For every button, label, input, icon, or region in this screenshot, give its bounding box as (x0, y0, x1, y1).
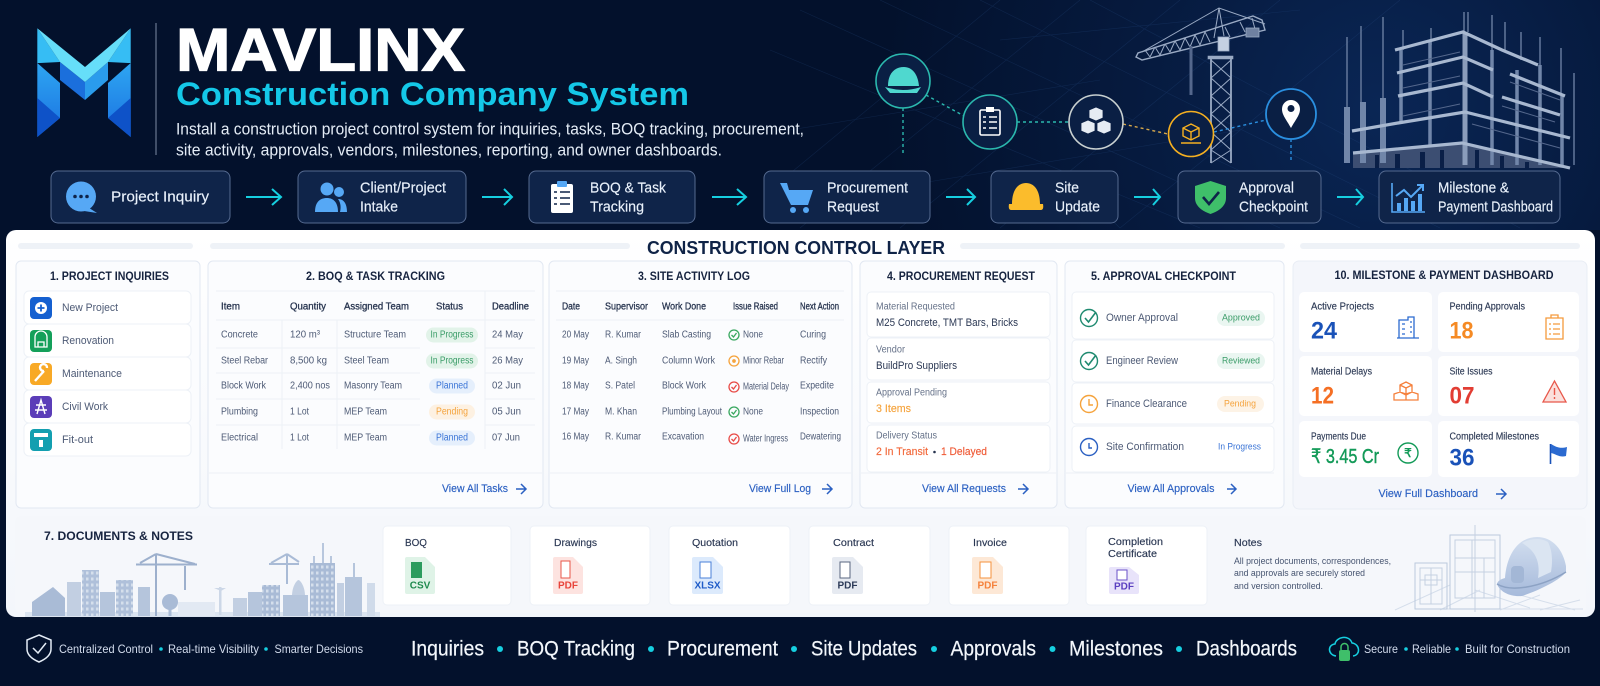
link: view full dashboard: View Full Dashboard (1378, 488, 1478, 500)
field: material requested: Material Requested (876, 302, 955, 312)
notes: and approvals are securely stored (1234, 568, 1365, 578)
table rows: 8,500 kg (290, 356, 327, 366)
building rebar (1347, 12, 1574, 165)
icon node: location pin (1266, 89, 1316, 139)
log rows: Column Work (662, 356, 716, 366)
field: delivery status: 2 In Transit (876, 446, 928, 458)
kpi: payments due: Payments Due (1311, 432, 1366, 442)
kpi: material delays: Material Delays (1311, 366, 1372, 378)
arrow 3 (712, 189, 746, 205)
log rows: Plumbing Layout (662, 406, 722, 418)
log rows: Inspection (800, 406, 839, 418)
footer: cloud lock icon (1329, 637, 1359, 661)
footer: right tagline: Secure (1364, 642, 1398, 656)
table rows: Structure Team (344, 330, 406, 340)
description: Install a construction project control system for inquiries, tasks, BOQ tracking, procurement, (176, 120, 804, 138)
log rows: R. Kumar (605, 330, 642, 340)
panel: site activity log: 3. SITE ACTIVITY LOG (638, 271, 750, 283)
table rows: Masonry Team (344, 380, 402, 392)
row: owner approval (1072, 292, 1274, 339)
log rows: None (743, 330, 763, 340)
table header: Status (436, 302, 463, 312)
kpi: active projects (1299, 292, 1432, 352)
row: site confirmation: In Progress (1218, 442, 1261, 452)
panel: project inquiries: 1. PROJECT INQUIRIES (50, 271, 169, 283)
row: new project: New Project (62, 302, 118, 314)
arrow 4 (946, 189, 975, 205)
footer: left tagline (59, 642, 363, 656)
flow step 3: boq task tracking: Tracking (590, 198, 644, 216)
notes (1234, 537, 1391, 591)
footer: right tagline: Built for Construction (1465, 642, 1570, 656)
flow step 7: milestone dashboard (1379, 171, 1560, 223)
document: completion certificate pdf (1086, 526, 1207, 605)
status pills: Pending (436, 406, 468, 418)
flow step 6: approval checkpoint: Approval (1239, 180, 1294, 196)
flow step 3: boq task tracking: BOQ & Task (590, 180, 666, 196)
kpi: pending approvals: Pending Approvals (1450, 302, 1525, 312)
status pills: In Progress (430, 356, 474, 366)
kpi: completed milestones (1438, 421, 1579, 477)
document: completion certificate pdf: PDF (1114, 582, 1134, 592)
title: MAVLINX (176, 16, 465, 84)
log rows: 19 May (562, 356, 589, 366)
icon: users (315, 182, 347, 212)
row: maintenance: Maintenance (62, 368, 122, 380)
log header: Date (562, 302, 580, 312)
panel: procurement request: 4. PROCUREMENT REQUEST (887, 271, 1035, 283)
log rows (562, 330, 841, 444)
logo divider (156, 23, 157, 155)
footer: right tagline (1364, 642, 1570, 656)
document: invoice pdf: Invoice (973, 537, 1007, 549)
kpi: completed milestones: 36 (1450, 444, 1474, 472)
status pills: Planned (436, 432, 468, 444)
icon node: checklist (963, 95, 1017, 149)
footer: modules strip: Dashboards (1196, 638, 1297, 660)
log rows: Minor Rebar (743, 356, 784, 366)
kpi: pending approvals (1438, 292, 1579, 352)
flow step 1: project inquiry: Project Inquiry (111, 188, 210, 206)
log header: Supervisor (605, 302, 649, 312)
footer: left tagline: Real-time Visibility (168, 642, 259, 656)
row: renovation: Renovation (62, 335, 114, 347)
table rows (221, 330, 523, 444)
flow step 5: site update (991, 171, 1118, 223)
notes: All project documents, correspondences, (1234, 556, 1391, 566)
row: site confirmation (1072, 426, 1274, 472)
background glow (760, 0, 1600, 230)
link: view full log: View Full Log (749, 483, 811, 495)
table header: Item (221, 302, 240, 312)
flow step 4: procurement request: Procurement (827, 180, 909, 196)
log rows: Expedite (800, 380, 834, 392)
subtitle: Construction Company System (176, 76, 689, 112)
table rows: MEP Team (344, 406, 387, 418)
icon node: material stack (1069, 95, 1123, 149)
table rows: Plumbing (221, 406, 258, 418)
log rows: Slab Casting (662, 330, 711, 340)
document: completion certificate pdf: Certificate (1108, 548, 1157, 560)
kpi: material delays: 12 (1311, 382, 1334, 410)
log rows: M. Khan (605, 406, 637, 418)
field: vendor (867, 338, 1050, 380)
arrow 6 (1337, 189, 1363, 205)
document: drawings pdf: PDF (558, 580, 578, 592)
link: view all tasks: View All Tasks (442, 483, 508, 495)
table rows: Concrete (221, 330, 258, 340)
row: finance clearance (1072, 383, 1274, 424)
panel: milestone and payment dashboard: 10. MILESTONE & PAYMENT DASHBOARD (1334, 270, 1554, 282)
arrow 1 (246, 189, 281, 205)
table rows: 1 Lot (290, 406, 309, 418)
footer: right tagline: Reliable (1412, 642, 1451, 656)
document: contract pdf: Contract (833, 537, 874, 549)
field: approval pending: 3 Items (876, 403, 911, 415)
kpi: active projects: 24 (1311, 318, 1338, 344)
panel: documents and notes (15, 516, 1586, 617)
panel: project inquiries (16, 261, 200, 508)
status pills: In Progress (430, 330, 474, 340)
field: material requested (867, 292, 1050, 337)
flow step 7: milestone dashboard: Payment Dashboard (1438, 198, 1553, 216)
table rows: 1 Lot (290, 432, 309, 444)
kpi: payments due: ₹ 3.45 Cr (1311, 446, 1379, 468)
city skyline illustration (25, 543, 380, 617)
field: approval pending: Approval Pending (876, 388, 947, 398)
flow step 2: client intake (298, 171, 466, 223)
flow step 2: client intake: Client/Project (360, 180, 447, 196)
log rows: 16 May (562, 432, 589, 442)
flow step 4: procurement request: Request (827, 198, 880, 216)
link: view all approvals: View All Approvals (1128, 483, 1215, 495)
log rows: S. Patel (605, 380, 635, 392)
icon: speech bubble (66, 182, 97, 213)
document: boq csv (383, 526, 511, 605)
field: approval pending (867, 382, 1050, 423)
log rows: A. Singh (605, 356, 637, 366)
log rows: Rectify (800, 356, 827, 366)
footer: left tagline: Centralized Control (59, 642, 153, 656)
row: owner approval: Owner Approval (1106, 312, 1178, 324)
tower crane illustration (1136, 8, 1265, 163)
blueprint lines background (770, 0, 1520, 228)
main white panel (6, 230, 1595, 617)
icon: growth chart (1392, 183, 1425, 212)
panel: boq and task tracking: 2. BOQ & TASK TRACKING (306, 271, 445, 283)
footer: modules strip: BOQ Tracking (517, 638, 635, 660)
kpi: material delays (1299, 356, 1432, 416)
footer: left tagline: Smarter Decisions (274, 642, 363, 656)
row: owner approval: Approved (1222, 312, 1260, 324)
table rows: Steel Rebar (221, 356, 269, 366)
table header: Deadline (492, 302, 529, 312)
log rows: 20 May (562, 330, 589, 340)
table header: Assigned Team (344, 302, 409, 312)
panel: approval checkpoint: 5. APPROVAL CHECKPOINT (1091, 271, 1236, 283)
flow step 3: boq task tracking (529, 171, 695, 223)
icon: clipboard (551, 181, 573, 213)
issue status icons (729, 330, 739, 444)
kpi: payments due (1299, 421, 1432, 477)
table rows: Steel Team (344, 356, 389, 366)
log rows: None (743, 406, 763, 418)
footer: modules strip (411, 638, 1297, 660)
table rows: Block Work (221, 380, 267, 392)
panel: site activity log (549, 261, 852, 508)
document: invoice pdf: PDF (978, 580, 998, 592)
panel: milestone and payment dashboard (1293, 261, 1587, 509)
icon: hard hat (1009, 183, 1043, 210)
table header: Quantity (290, 302, 326, 312)
document: quotation xlsx: Quotation (692, 537, 738, 549)
row: engineer review (1072, 340, 1274, 382)
table rows: 26 May (492, 356, 523, 366)
description (176, 120, 804, 160)
log rows: 18 May (562, 380, 589, 392)
link: view all requests: View All Requests (922, 483, 1006, 495)
document: boq csv: BOQ (405, 537, 427, 549)
footer: shield icon (27, 635, 51, 662)
status pills (426, 328, 478, 446)
icon node: gold materials (1168, 112, 1214, 156)
footer: modules strip: Site Updates (811, 638, 917, 660)
table rows: 05 Jun (492, 406, 521, 418)
footer: modules strip: Procurement (667, 638, 778, 660)
table rows: 2,400 nos (290, 380, 330, 392)
flow step 5: site update: Site (1055, 180, 1079, 196)
decorative heading bands (18, 243, 1580, 249)
log header: Next Action (800, 302, 839, 312)
flow step 4: procurement request (764, 171, 930, 223)
field: delivery status: Delivery Status (876, 430, 937, 442)
log rows: Curing (800, 330, 826, 340)
row: civil work (24, 390, 191, 423)
footer: modules strip: Approvals (950, 638, 1036, 660)
building ground floor (1353, 143, 1570, 168)
row: finance clearance: Pending (1224, 398, 1256, 410)
log rows: Block Work (662, 380, 707, 392)
kpi: completed milestones: Completed Milestones (1450, 432, 1539, 442)
log rows: Dewatering (800, 432, 841, 442)
table rows: 24 May (492, 330, 523, 340)
row: fit-out: Fit-out (62, 434, 93, 446)
log rows: R. Kumar (605, 432, 642, 442)
row: fit-out (24, 423, 191, 456)
panel: boq and task tracking (208, 261, 543, 508)
log rows: Water Ingress (743, 434, 788, 444)
flow step 1: project inquiry (51, 171, 230, 223)
row: engineer review: Reviewed (1222, 356, 1260, 366)
kpi: site issues (1438, 356, 1579, 416)
flow step 5: site update: Update (1055, 198, 1100, 216)
field: delivery status: 1 Delayed (941, 446, 987, 458)
kpi: active projects: Active Projects (1311, 302, 1374, 312)
field: material requested: M25 Concrete, TMT Bars, Bricks (876, 317, 1018, 329)
building slabs (1352, 32, 1570, 168)
row: engineer review: Engineer Review (1106, 355, 1178, 367)
icon: cart (780, 183, 813, 213)
building under construction illustration (1347, 12, 1574, 168)
icon node: helmet (876, 54, 930, 108)
document: invoice pdf (949, 526, 1069, 605)
row: civil work: Civil Work (62, 401, 108, 413)
table rows: 07 Jun (492, 432, 520, 444)
log rows: Excavation (662, 432, 704, 442)
row: renovation (24, 324, 191, 357)
document: quotation xlsx (669, 526, 790, 605)
row: new project (24, 291, 191, 324)
dotted connectors (903, 95, 1291, 160)
description: site activity, approvals, vendors, milestones, reporting, and owner dashboards. (176, 140, 722, 160)
document: drawings pdf: Drawings (554, 537, 597, 549)
document: contract pdf (809, 526, 930, 605)
row: maintenance (24, 357, 191, 390)
panel: procurement request (860, 261, 1057, 508)
flow step 6: approval checkpoint (1178, 171, 1321, 223)
table rows: 02 Jun (492, 380, 521, 392)
table rows: Electrical (221, 432, 258, 444)
field: vendor: BuildPro Suppliers (876, 360, 957, 372)
section title: CONSTRUCTION CONTROL LAYER (647, 238, 945, 258)
arrow 2 (482, 189, 512, 205)
notes: and version controlled. (1234, 581, 1323, 591)
panel: documents and notes: 7. DOCUMENTS & NOTES (44, 531, 193, 543)
kpi: payments due: ₹ (1404, 446, 1412, 460)
arrow 5 (1134, 189, 1160, 205)
flow step 6: approval checkpoint: Checkpoint (1239, 198, 1309, 216)
footer: modules strip: Inquiries (411, 638, 484, 660)
document: drawings pdf (530, 526, 650, 605)
building railings (1403, 52, 1560, 148)
notes: Notes (1234, 537, 1262, 549)
row: site confirmation: Site Confirmation (1106, 441, 1184, 453)
document: completion certificate pdf: Completion (1108, 536, 1163, 548)
log header (562, 302, 839, 312)
log rows: 17 May (562, 406, 589, 418)
icon: shield (1195, 181, 1226, 214)
status pills: Planned (436, 380, 468, 392)
log rows: Material Delay (743, 382, 789, 392)
document: quotation xlsx: XLSX (694, 580, 721, 592)
field: delivery status (867, 425, 1050, 472)
panel: approval checkpoint (1065, 261, 1284, 508)
log header: Issue Raised (733, 302, 778, 312)
kpi: pending approvals: 18 (1450, 318, 1474, 344)
table rows: MEP Team (344, 432, 387, 444)
flow step 7: milestone dashboard: Milestone & (1438, 180, 1509, 196)
kpi: site issues: 07 (1450, 382, 1474, 410)
document: boq csv: CSV (410, 580, 431, 592)
flow step 2: client intake: Intake (360, 198, 398, 216)
field: vendor: Vendor (876, 344, 906, 356)
building columns (1347, 98, 1383, 163)
table rows: 120 m³ (290, 330, 321, 340)
footer: modules strip: Milestones (1069, 638, 1163, 660)
document: contract pdf: PDF (838, 580, 858, 592)
blueprint and helmet illustration (1395, 525, 1583, 612)
table header (221, 302, 529, 312)
logo (37, 28, 131, 137)
row: finance clearance: Finance Clearance (1106, 398, 1187, 410)
log header: Work Done (662, 302, 706, 312)
kpi: site issues: Site Issues (1450, 366, 1492, 378)
